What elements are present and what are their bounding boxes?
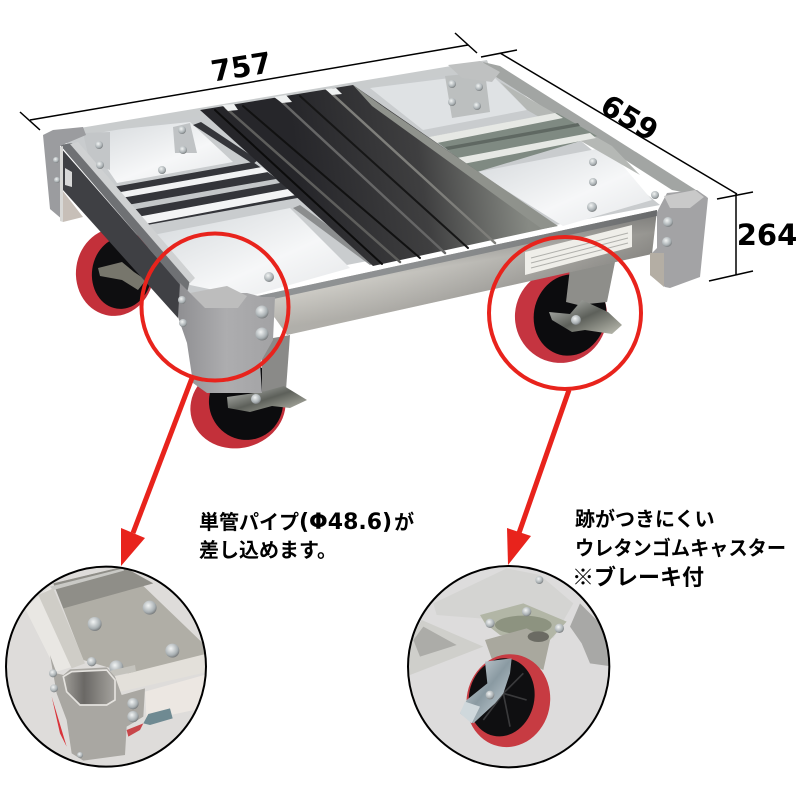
storage panel: back right bbox=[370, 73, 527, 130]
wheel: right front bbox=[504, 259, 622, 373]
floor plate bbox=[53, 567, 213, 675]
storage panel: front right bbox=[477, 147, 652, 226]
post: front left corner bbox=[178, 283, 275, 393]
cart photo bbox=[43, 60, 708, 459]
central deck panels bbox=[200, 85, 558, 266]
panel brackets bbox=[83, 72, 490, 265]
post: back corner bbox=[448, 61, 500, 110]
text: caster note: ウレタンゴムキャスター bbox=[575, 536, 786, 560]
text: pipe insert note: 差し込めます。 bbox=[199, 539, 337, 562]
platform base bbox=[60, 65, 660, 295]
rail: back long rail bbox=[80, 60, 490, 135]
text: caster note: ※ブレーキ付 bbox=[572, 565, 704, 590]
label: caution sticker and front rail bbox=[253, 210, 657, 335]
arrow: caster to detail bbox=[507, 390, 569, 565]
dimension: depth 659: 659 bbox=[595, 88, 664, 148]
detail circle: caster bbox=[400, 560, 613, 773]
wheel: back left bbox=[70, 223, 160, 321]
dimension: width 757 bbox=[20, 33, 477, 130]
callout circle: corner post bbox=[142, 234, 288, 380]
text: caster note: 跡がつきにくい bbox=[575, 507, 715, 531]
text: pipe insert note bbox=[199, 510, 414, 562]
post: right corner bbox=[650, 190, 708, 288]
swivel bbox=[480, 603, 567, 640]
dimension: depth 659 bbox=[481, 50, 753, 199]
dimension: width 757: 757 bbox=[209, 45, 274, 89]
base plate bbox=[433, 568, 573, 638]
detail circle: corner post bbox=[5, 566, 207, 768]
post: back left corner bbox=[43, 127, 86, 222]
text: caster note bbox=[572, 507, 786, 590]
cross slats: right bbox=[429, 113, 597, 172]
storage panel: front left bbox=[153, 208, 350, 297]
dimension: height 264 bbox=[709, 194, 797, 281]
callout circle: caster bbox=[489, 237, 641, 389]
text: pipe insert note: 単管パイプ(Φ48.6)が bbox=[199, 510, 414, 535]
bolts on panels bbox=[95, 126, 659, 282]
corner post bbox=[50, 655, 145, 761]
wheel: front left bbox=[181, 335, 307, 459]
dimension: height 264: 264 bbox=[737, 218, 797, 252]
arrow: corner post to detail bbox=[121, 378, 192, 566]
rail: right short rail bbox=[483, 62, 707, 197]
storage panel: back left bbox=[83, 122, 233, 183]
brake pedal bbox=[460, 658, 512, 723]
rail: dark left rail bbox=[60, 142, 195, 318]
cross slats: left bbox=[113, 162, 303, 225]
wheel bbox=[466, 654, 550, 748]
